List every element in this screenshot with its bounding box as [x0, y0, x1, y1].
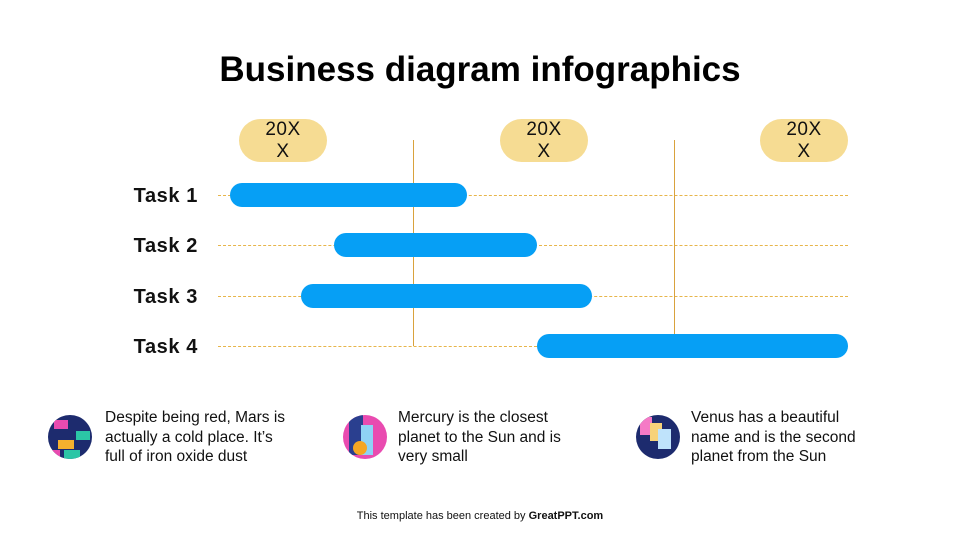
text: mars: Despite being red, Mars is	[105, 409, 285, 426]
text: mars	[105, 409, 285, 465]
text: mercury: planet to the Sun and is	[398, 428, 561, 446]
title: Business diagram infographics	[219, 50, 741, 89]
text: mars: full of iron oxide dust	[105, 448, 247, 465]
pill: period 1: 20X	[265, 119, 301, 140]
footer credit: This template has been created by GreatPPT.com	[357, 510, 603, 522]
bar: task 1	[230, 183, 467, 207]
gantt chart	[134, 119, 848, 358]
label: task 3: Task 3	[134, 286, 198, 308]
text: mars: actually a cold place. It’s	[105, 428, 273, 446]
label: task 1: Task 1	[134, 185, 198, 207]
pill: period 2: X	[537, 141, 551, 162]
bar: task 2	[334, 233, 537, 257]
pill: period 1: X	[276, 141, 290, 162]
bar: task 3	[301, 284, 592, 308]
text: venus: Venus has a beautiful	[691, 409, 839, 426]
pill: period 1	[239, 119, 327, 162]
text: mercury	[398, 409, 561, 465]
text: venus: name and is the second	[691, 428, 856, 446]
text: venus	[691, 409, 856, 465]
pill: period 2: 20X	[526, 119, 562, 140]
text: mercury: very small	[398, 448, 468, 465]
bar: task 4	[537, 334, 848, 358]
text: venus: planet from the Sun	[691, 448, 826, 465]
pill: period 2	[500, 119, 588, 162]
pill: period 3: 20X	[786, 119, 822, 140]
pill: period 3: X	[797, 141, 811, 162]
text: mercury: Mercury is the closest	[398, 409, 548, 426]
pill: period 3	[760, 119, 848, 162]
icon: binary code	[48, 415, 92, 459]
label: task 4: Task 4	[134, 336, 198, 358]
label: task 2: Task 2	[134, 235, 198, 257]
icon: documents	[636, 415, 680, 459]
icon: phone coin	[343, 415, 387, 459]
